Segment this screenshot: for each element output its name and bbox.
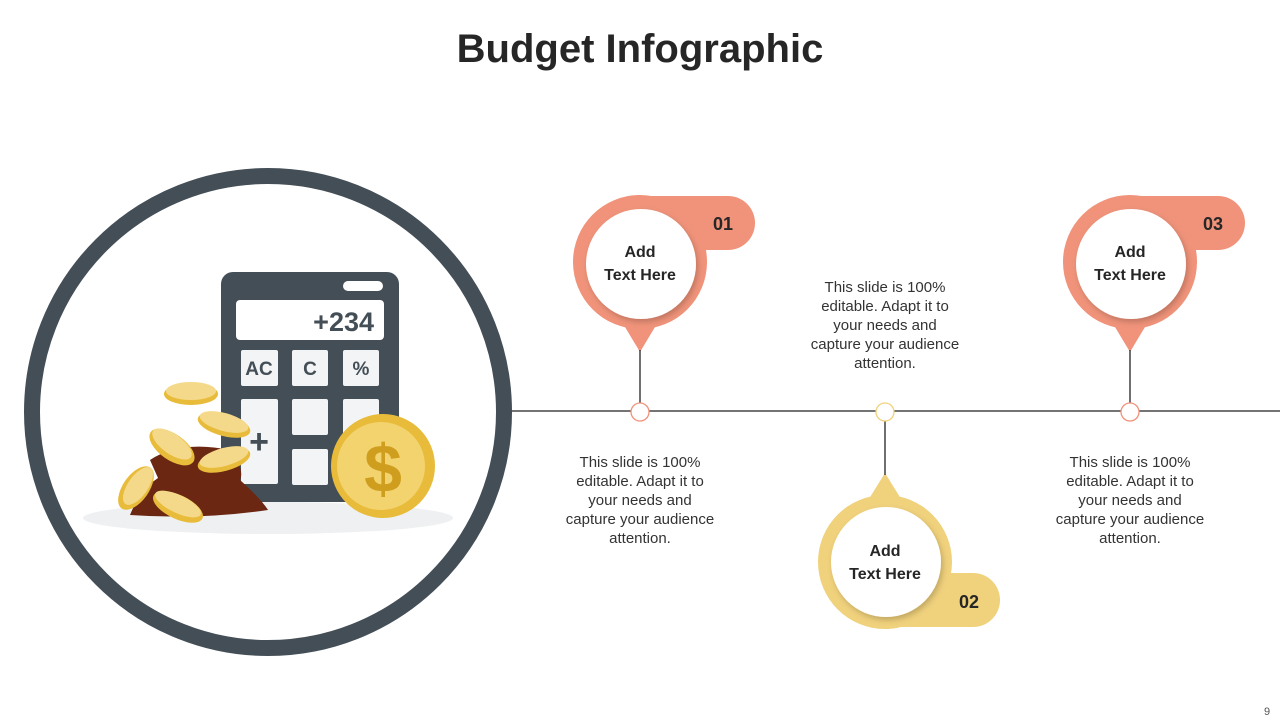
icon: money bag with coins <box>111 382 268 529</box>
text block 1: attention. <box>609 530 671 547</box>
title: Budget Infographic <box>457 27 823 71</box>
text block 1: your needs and <box>588 492 692 509</box>
pin 02: Text Here <box>849 566 921 583</box>
page number: 9 <box>1264 706 1270 718</box>
pin 01 <box>573 195 755 421</box>
pin 01: 01 <box>713 214 733 234</box>
pin 01: Text Here <box>604 267 676 284</box>
timeline line <box>510 410 1280 412</box>
text block 1: editable. Adapt it to <box>576 473 704 490</box>
pin 02 <box>818 403 1000 629</box>
text block 2: attention. <box>854 355 916 372</box>
text block 2: This slide is 100% <box>825 279 945 296</box>
pin 03: Add <box>1114 244 1146 261</box>
icon: calculator: C <box>303 359 317 380</box>
icon: dollar coin <box>331 414 435 518</box>
text block 3: editable. Adapt it to <box>1066 473 1194 490</box>
text block 2: capture your audience <box>811 336 959 353</box>
pin 03: Text Here <box>1094 267 1166 284</box>
icon: dollar coin: $ <box>364 431 402 507</box>
pin 02: Add <box>869 543 901 560</box>
pin 01: Add <box>624 244 656 261</box>
icon: calculator: % <box>353 359 370 380</box>
text block 2: editable. Adapt it to <box>821 298 949 315</box>
text block 1: capture your audience <box>566 511 714 528</box>
icon: calculator <box>221 272 399 502</box>
icon: calculator: +234 <box>313 307 374 337</box>
big circle illustration <box>32 176 504 648</box>
icon: calculator: AC <box>245 359 273 380</box>
text block 2: your needs and <box>833 317 937 334</box>
pin 03 <box>1063 195 1245 421</box>
text block 3: This slide is 100% <box>1070 454 1190 471</box>
text block 1: This slide is 100% <box>580 454 700 471</box>
icon: calculator: + <box>249 423 269 461</box>
pin 03: 03 <box>1203 214 1223 234</box>
shadow ellipse <box>83 502 453 534</box>
text block 3: your needs and <box>1078 492 1182 509</box>
text block 3: capture your audience <box>1056 511 1204 528</box>
text block 3: attention. <box>1099 530 1161 547</box>
pin 02: 02 <box>959 592 979 612</box>
